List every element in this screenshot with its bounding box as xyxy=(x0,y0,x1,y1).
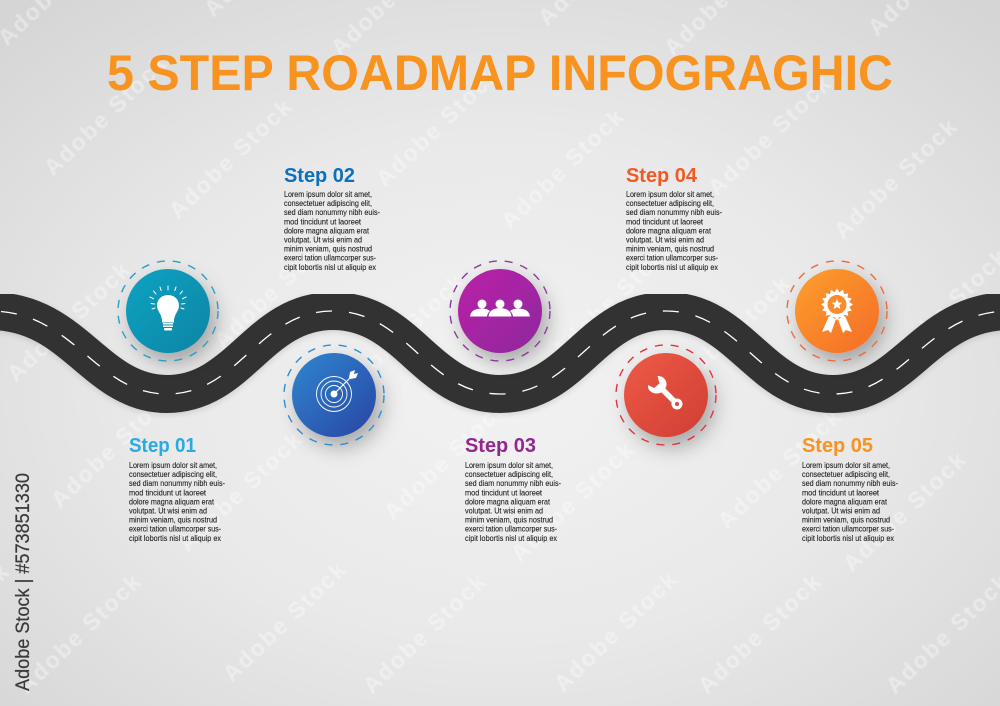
title: 5 STEP ROADMAP INFOGRAGHIC xyxy=(107,45,893,101)
step 01 text block: exerci tation ullamcorper sus- xyxy=(129,524,221,534)
step 03 text block xyxy=(465,435,561,543)
step 03 text block: exerci tation ullamcorper sus- xyxy=(465,524,557,534)
step 02 text block: dolore magna aliquam erat xyxy=(284,225,369,235)
icon: target with arrow xyxy=(316,370,358,412)
step 01 text block: volutpat. Ut wisi enim ad xyxy=(129,506,207,516)
step 01 text block: Step 01 xyxy=(129,435,196,457)
step 04 text block: Lorem ipsum dolor sit amet, xyxy=(626,189,714,199)
step 3 marker: team xyxy=(450,261,550,361)
icon: three people xyxy=(470,300,530,316)
icon: award ribbon xyxy=(821,288,853,333)
step 05 text block: dolore magna aliquam erat xyxy=(802,496,887,506)
step 03 text block: dolore magna aliquam erat xyxy=(465,496,550,506)
watermark pattern: Adobe Stock xyxy=(173,427,307,557)
step 05 text block: volutpat. Ut wisi enim ad xyxy=(802,506,880,516)
watermark pattern: Adobe Stock xyxy=(702,71,836,201)
step 01 text block: dolore magna aliquam erat xyxy=(129,496,214,506)
step 1 marker: lightbulb xyxy=(118,261,218,361)
watermark pattern: Adobe Stock xyxy=(208,224,342,354)
step 05 text block: Lorem ipsum dolor sit amet, xyxy=(802,460,890,470)
watermark pattern: Adobe Stock xyxy=(335,269,469,399)
step 04 text block: exerci tation ullamcorper sus- xyxy=(626,253,718,263)
step 04 text block: volutpat. Ut wisi enim ad xyxy=(626,234,704,244)
step 2 marker: target xyxy=(284,345,384,445)
watermark pattern: Adobe Stock xyxy=(546,234,680,364)
step 05 text block xyxy=(802,435,898,543)
step 02 text block xyxy=(284,165,380,272)
step 01 text block xyxy=(129,435,225,543)
step 01 text block: consectetuer adipiscing elit, xyxy=(129,469,217,479)
watermark pattern: Adobe Stock xyxy=(505,437,639,567)
step 01 text block: Lorem ipsum dolor sit amet, xyxy=(129,460,217,470)
watermark pattern: Adobe Stock xyxy=(217,557,351,687)
step 03 text block: Step 03 xyxy=(465,435,536,457)
watermark pattern: Adobe Stock xyxy=(12,569,146,699)
watermark pattern: Adobe Stock xyxy=(548,567,682,697)
step 5 marker: award xyxy=(787,261,887,361)
step 03 text block: volutpat. Ut wisi enim ad xyxy=(465,506,543,516)
stock credit: Adobe Stock | #573851330 xyxy=(12,473,34,691)
step 02 text block: Lorem ipsum dolor sit amet, xyxy=(284,189,372,199)
step 04 text block: dolore magna aliquam erat xyxy=(626,225,711,235)
step 02 text block: Step 02 xyxy=(284,165,355,187)
step 01 text block: mod tincidunt ut laoreet xyxy=(129,487,206,497)
step 04 text block: consectetuer adipiscing elit, xyxy=(626,198,714,208)
step 04 text block: sed diam nonummy nibh euis- xyxy=(626,207,722,217)
step 04 text block: mod tincidunt ut laoreet xyxy=(626,216,703,226)
step 01 text block: sed diam nonummy nibh euis- xyxy=(129,478,225,488)
icon: wrench xyxy=(648,376,682,410)
watermark pattern: Adobe Stock xyxy=(712,404,846,534)
watermark pattern: Adobe Stock xyxy=(661,271,795,401)
road xyxy=(0,311,1000,394)
watermark pattern: Adobe Stock xyxy=(837,447,971,577)
step 05 text block: mod tincidunt ut laoreet xyxy=(802,487,879,497)
step 03 text block: sed diam nonummy nibh euis- xyxy=(465,478,561,488)
watermark pattern: Adobe Stock xyxy=(1,257,135,387)
step 04 text block: cipit lobortis nisl ut aliquip ex xyxy=(626,262,719,272)
step 02 text block: minim veniam, quis nostrud xyxy=(284,244,372,254)
step 01 text block: minim veniam, quis nostrud xyxy=(129,515,217,525)
step 03 text block: minim veniam, quis nostrud xyxy=(465,515,553,525)
step 01 text block: cipit lobortis nisl ut aliquip ex xyxy=(129,533,222,543)
watermark pattern: Adobe Stock xyxy=(692,569,826,699)
step 02 text block: consectetuer adipiscing elit, xyxy=(284,198,372,208)
watermark pattern: Adobe Stock xyxy=(370,62,504,192)
step 05 text block: consectetuer adipiscing elit, xyxy=(802,469,890,479)
step 04 text block: minim veniam, quis nostrud xyxy=(626,244,714,254)
watermark pattern: Adobe Stock xyxy=(828,114,962,244)
step 04 text block: Step 04 xyxy=(626,165,698,187)
step 03 text block: Lorem ipsum dolor sit amet, xyxy=(465,460,553,470)
step 02 text block: cipit lobortis nisl ut aliquip ex xyxy=(284,262,377,272)
watermark pattern: Adobe Stock xyxy=(45,383,179,513)
step 03 text block: cipit lobortis nisl ut aliquip ex xyxy=(465,533,558,543)
step 02 text block: sed diam nonummy nibh euis- xyxy=(284,207,380,217)
step 05 text block: exerci tation ullamcorper sus- xyxy=(802,524,894,534)
step 02 text block: volutpat. Ut wisi enim ad xyxy=(284,234,362,244)
step 04 text block xyxy=(626,165,722,272)
watermark pattern: Adobe Stock xyxy=(378,395,512,525)
watermark pattern: Adobe Stock xyxy=(357,569,491,699)
step 03 text block: mod tincidunt ut laoreet xyxy=(465,487,542,497)
step 02 text block: exerci tation ullamcorper sus- xyxy=(284,253,376,263)
watermark pattern: Adobe Stock xyxy=(163,94,297,224)
step 03 text block: consectetuer adipiscing elit, xyxy=(465,469,553,479)
step 4 marker: wrench xyxy=(616,345,716,445)
step 05 text block: sed diam nonummy nibh euis- xyxy=(802,478,898,488)
watermark pattern: Adobe Stock xyxy=(38,51,172,181)
step 05 text block: minim veniam, quis nostrud xyxy=(802,515,890,525)
step 05 text block: Step 05 xyxy=(802,435,873,457)
step 02 text block: mod tincidunt ut laoreet xyxy=(284,216,361,226)
icon: lightbulb xyxy=(150,286,186,330)
watermark pattern: Adobe Stock xyxy=(495,104,629,234)
step 05 text block: cipit lobortis nisl ut aliquip ex xyxy=(802,533,895,543)
